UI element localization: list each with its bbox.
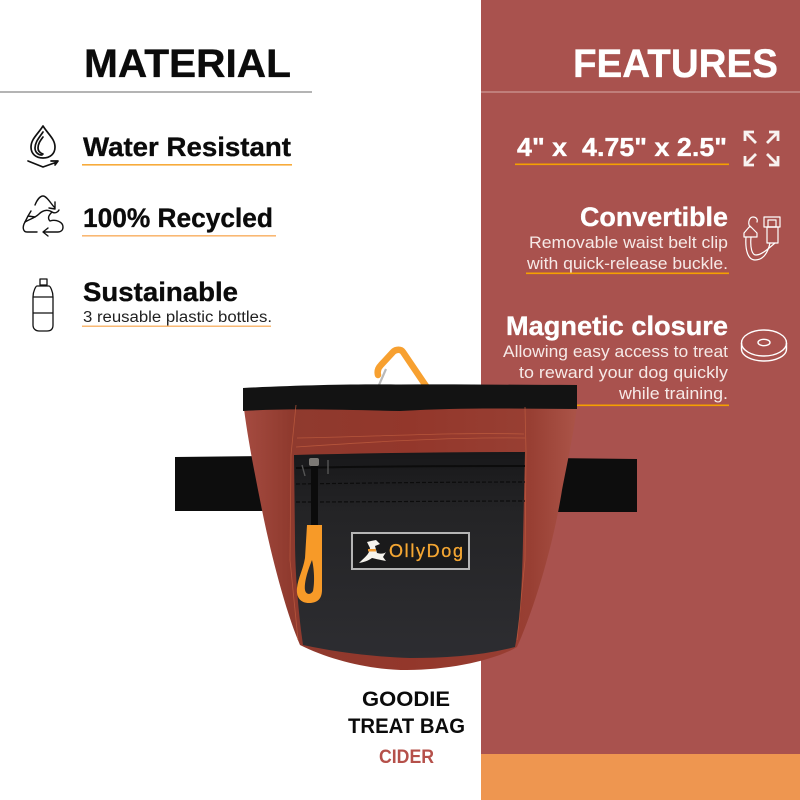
material item: recycled: [23, 196, 276, 237]
orange zipper tab: [297, 525, 322, 603]
brand patch: [352, 533, 469, 569]
icon: belt clip: [744, 217, 780, 260]
text: magnetic closure heading: Magnetic closure: [506, 311, 728, 341]
feature: magnetic closure: to reward your dog quickly: [519, 363, 729, 382]
heading: material: MATERIAL: [84, 42, 291, 86]
panel: features background: [481, 0, 800, 754]
text: 3 reusable plastic bottles: 3 reusable plastic bottles.: [83, 309, 272, 326]
text: water resistant: Water Resistant: [83, 132, 291, 162]
text: ollydog logo: OllyDog: [389, 541, 463, 561]
text: convertible description: Removable waist belt clip: [529, 233, 728, 252]
feature: convertible: with quick-release buckle.: [526, 254, 728, 273]
black front pocket: [294, 452, 525, 658]
heading: features: FEATURES: [573, 42, 778, 86]
feature: convertible: [526, 202, 780, 274]
dog logo: [359, 540, 386, 563]
text: treat bag: TREAT BAG: [348, 715, 465, 738]
feature: magnetic closure: while training.: [618, 384, 728, 403]
product photo: treat bag: [175, 350, 637, 670]
feature: dimensions: [515, 132, 778, 165]
text: goodie: GOODIE: [362, 688, 450, 711]
text: sustainable: Sustainable: [83, 277, 238, 307]
zipper rows: [296, 466, 525, 502]
icon: water drop: [28, 126, 58, 167]
carabiner: [378, 350, 426, 386]
belt: [175, 456, 637, 512]
bag top binding: [243, 384, 577, 411]
stitching: [290, 405, 526, 640]
text: 100% recycled: 100% Recycled: [83, 203, 273, 233]
icon: bottle: [33, 279, 53, 331]
zipper pull: [297, 458, 328, 603]
material item: sustainable: [33, 277, 272, 331]
icon: magnet disc: [742, 330, 786, 361]
feature: magnetic closure: [503, 311, 786, 406]
text: magnetic closure description: Allowing easy access to treat: [503, 342, 728, 361]
icon: expand arrows: [745, 132, 778, 165]
text: dimensions: 4" x 4.75" x 2.5": [517, 132, 727, 162]
divider: [481, 92, 800, 93]
text: cider: CIDER: [379, 747, 434, 768]
divider: [0, 92, 312, 93]
product name: [348, 688, 465, 768]
panel: bottom orange band: [481, 754, 800, 800]
icon: recycle wave: [23, 196, 63, 236]
material item: water resistant: [28, 126, 292, 167]
bag body: [244, 407, 577, 670]
text: convertible heading: Convertible: [580, 202, 728, 232]
